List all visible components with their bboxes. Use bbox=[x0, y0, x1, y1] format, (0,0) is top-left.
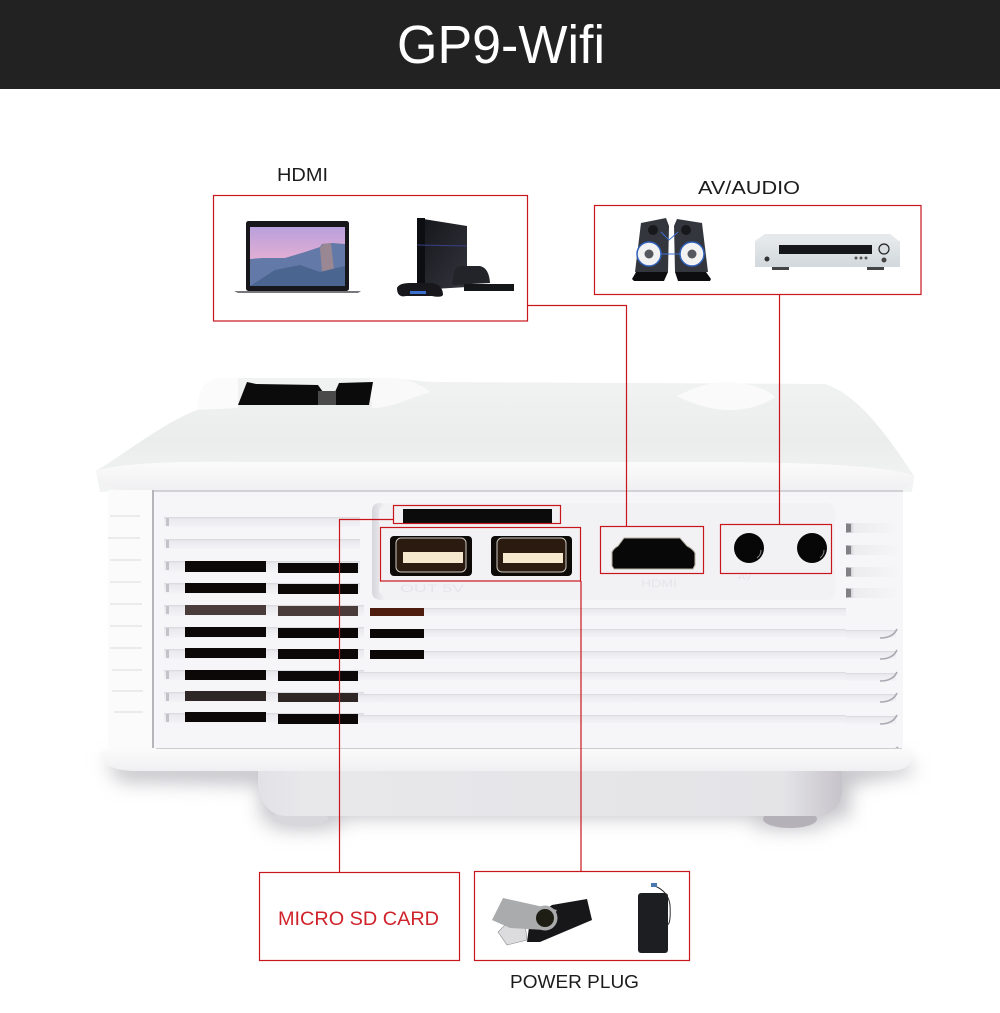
av audio label: AV/AUDIO bbox=[698, 178, 800, 198]
faint port labels: OUT 5V bbox=[400, 583, 465, 595]
horizontal slats bbox=[164, 517, 896, 724]
icon: game console bbox=[397, 218, 514, 297]
hdmi box bbox=[214, 196, 528, 321]
hdmi port bbox=[612, 538, 695, 569]
micro sd label: MICRO SD CARD bbox=[278, 909, 439, 930]
av highlight box bbox=[720, 524, 832, 574]
faint port labels: HDMI bbox=[641, 578, 677, 590]
body front bbox=[108, 490, 903, 748]
sd highlight box bbox=[394, 506, 560, 524]
projector shadow bbox=[104, 760, 916, 830]
port panel bbox=[372, 503, 835, 600]
projector bbox=[96, 378, 916, 830]
icon: laptop bbox=[234, 221, 361, 293]
faint port labels bbox=[400, 571, 753, 595]
hdmi label: HDMI bbox=[277, 165, 328, 185]
control pad bbox=[677, 382, 775, 410]
icon: av receiver bbox=[755, 234, 900, 270]
left side ribs bbox=[108, 516, 143, 712]
icon: portable hard drive bbox=[638, 883, 670, 953]
vent holes bbox=[185, 561, 424, 724]
connector: usb bbox=[580, 581, 582, 871]
micro sd slot bbox=[403, 509, 552, 523]
header bar bbox=[0, 0, 1000, 89]
icon: usb flash drive bbox=[492, 898, 592, 945]
front lip top bbox=[96, 462, 914, 490]
connector: hdmi bbox=[527, 306, 626, 526]
usb port 2 bbox=[491, 536, 572, 576]
slat end markers bbox=[166, 518, 169, 722]
micro sd box bbox=[260, 872, 460, 960]
hdmi highlight box bbox=[600, 526, 704, 574]
storage box bbox=[474, 872, 690, 960]
audio jack 1 bbox=[734, 533, 764, 563]
bottom lip bbox=[100, 748, 911, 771]
usb highlight box bbox=[380, 528, 580, 581]
base and feet bbox=[258, 765, 842, 828]
right vents bbox=[846, 523, 900, 753]
title: GP9-Wifi bbox=[397, 15, 605, 75]
connector: micro sd bbox=[340, 520, 393, 872]
focus wheel bbox=[238, 382, 373, 405]
audio jack 2 bbox=[797, 533, 827, 563]
power plug label: POWER PLUG bbox=[510, 971, 639, 992]
av audio box bbox=[594, 206, 921, 294]
faint port labels: AV bbox=[738, 571, 753, 583]
connector: av audio bbox=[778, 294, 780, 524]
top surface bbox=[96, 378, 914, 492]
usb port 1 bbox=[390, 536, 472, 576]
icon: speakers bbox=[632, 218, 711, 281]
